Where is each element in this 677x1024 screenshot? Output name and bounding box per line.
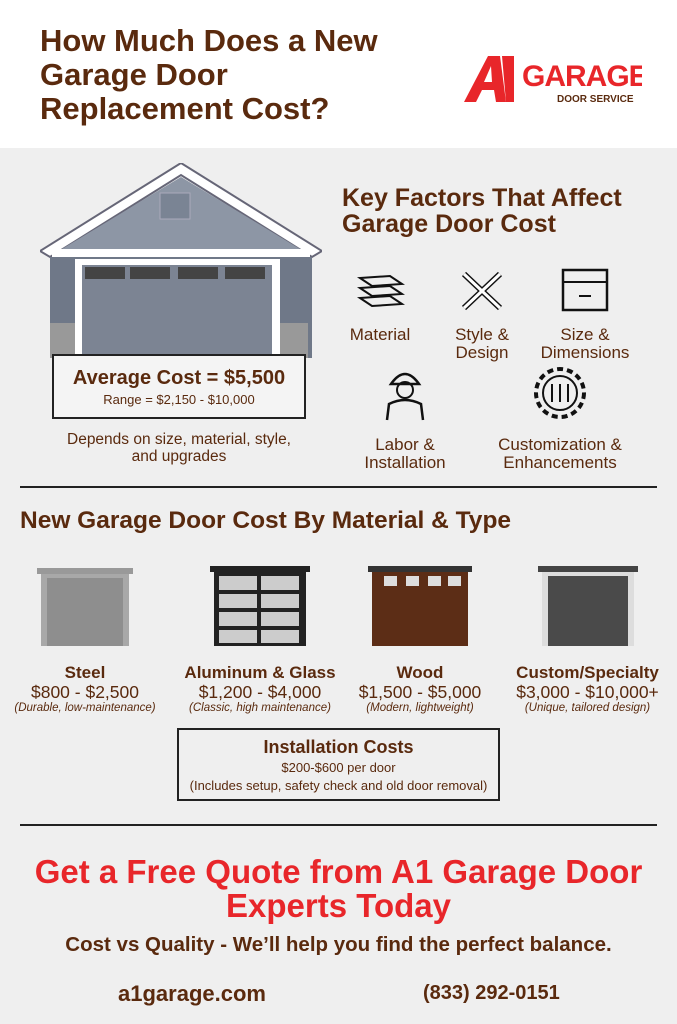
factor: customization: Customization & [498, 435, 622, 454]
house illustration [40, 163, 322, 358]
website: a1garage.com [118, 981, 266, 1006]
door: custom [516, 566, 659, 714]
installation costs box: $200-$600 per door [281, 760, 396, 775]
door: custom: $3,000 - $10,000+ [516, 682, 659, 702]
header band [0, 0, 677, 148]
door: wood [359, 566, 481, 714]
door: wood: (Modern, lightweight) [366, 702, 474, 714]
factor: labor [364, 372, 446, 472]
door: aluminum: (Classic, high maintenance) [189, 702, 331, 714]
title: Garage Door [40, 57, 228, 92]
material heading: New Garage Door Cost By Material & Type [20, 507, 511, 534]
key factors heading: Key Factors That Affect [342, 184, 622, 212]
factor: labor: Labor & [375, 435, 435, 454]
note text: Depends on size, material, style, [67, 431, 291, 448]
factor: style: Design [456, 343, 508, 362]
door: steel: Steel [65, 663, 105, 682]
key factors heading: Garage Door Cost [342, 210, 556, 238]
CTA heading: Get a Free Quote from A1 Garage Door [35, 853, 642, 890]
installation costs box: (Includes setup, safety check and old door removal) [190, 778, 487, 793]
installation costs box [177, 728, 500, 801]
CTA heading: Experts Today [226, 887, 451, 924]
logo [464, 56, 642, 105]
phone: (833) 292-0151 [423, 982, 560, 1004]
factor: style [455, 272, 509, 362]
subline: Cost vs Quality - We’ll help you find the perfect balance. [65, 933, 612, 956]
door: steel [14, 568, 156, 714]
door: custom: (Unique, tailored design) [525, 702, 650, 714]
door: wood: Wood [397, 663, 443, 682]
factor: customization: Enhancements [503, 453, 617, 472]
door: wood: $1,500 - $5,000 [359, 682, 481, 702]
factor: material: Material [350, 325, 410, 344]
factor: size: Size & [560, 325, 610, 344]
door: aluminum [184, 566, 336, 714]
door: steel: (Durable, low-maintenance) [14, 702, 156, 714]
door: steel: $800 - $2,500 [31, 682, 139, 702]
note text [67, 431, 291, 465]
factor: customization [498, 367, 622, 472]
factor: size: Dimensions [541, 343, 629, 362]
logo: DOOR SERVICE [557, 94, 634, 105]
installation costs box: Installation Costs [263, 737, 414, 757]
CTA heading [35, 853, 642, 924]
factor: size [541, 268, 629, 362]
average cost box: Range = $2,150 - $10,000 [103, 392, 255, 407]
door: aluminum: Aluminum & Glass [184, 663, 336, 682]
factor: labor: Installation [364, 453, 446, 472]
title: How Much Does a New [40, 23, 378, 58]
title [40, 23, 378, 126]
title: Replacement Cost? [40, 91, 329, 126]
average cost box [52, 354, 306, 419]
note text: and upgrades [132, 448, 226, 465]
average cost box: Average Cost = $5,500 [73, 367, 285, 389]
key factors heading [342, 184, 622, 238]
factor: material [350, 275, 410, 344]
door: custom: Custom/Specialty [516, 663, 659, 682]
door: aluminum: $1,200 - $4,000 [199, 682, 321, 702]
factor: style: Style & [455, 325, 509, 344]
